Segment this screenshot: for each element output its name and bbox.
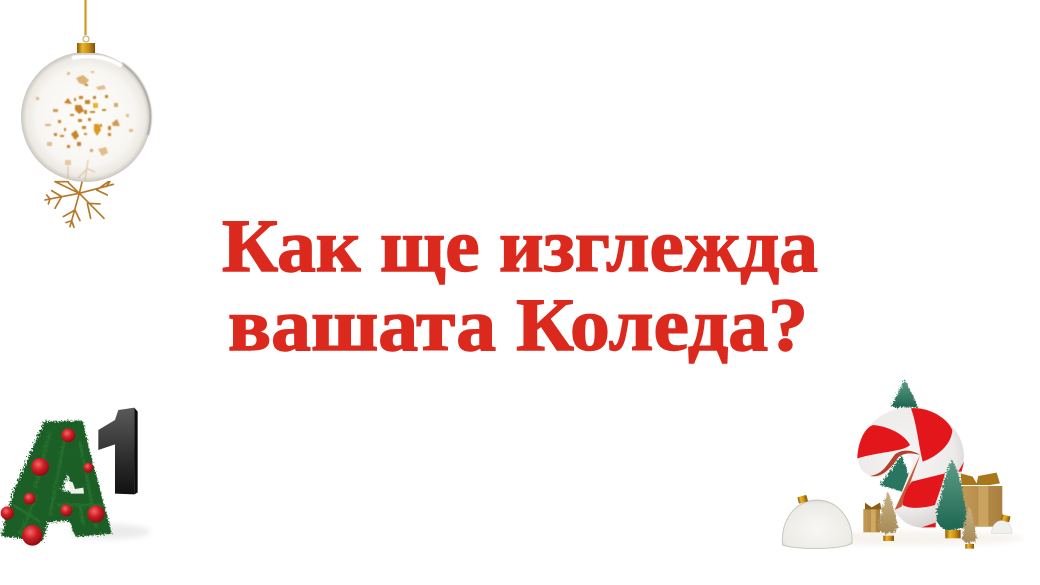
cane red stripe 2	[911, 408, 952, 462]
snowflake	[45, 177, 113, 227]
digit 1 side	[134, 408, 138, 494]
cane white body	[857, 408, 964, 528]
illustration: candy cane with gifts and trees	[782, 379, 1023, 549]
cap ring	[83, 36, 89, 42]
small dome ornament	[992, 514, 1012, 533]
glass dome ornament	[782, 495, 852, 549]
ground snow shadow	[797, 531, 1023, 546]
red baubles	[1, 428, 105, 546]
candy cane	[857, 408, 964, 528]
digit 1	[98, 408, 135, 494]
green bottle tree large	[937, 459, 966, 538]
cane red stripe 3	[903, 473, 945, 508]
title	[222, 205, 818, 367]
golden tree left	[878, 492, 898, 541]
reindeer	[68, 481, 84, 494]
title line 1: Как ще изглежда	[222, 205, 818, 288]
ornament cap	[77, 43, 95, 53]
small gift box	[863, 503, 882, 532]
large gift box	[960, 473, 1002, 527]
tree behind cane lower	[880, 455, 917, 497]
green letter A	[3, 422, 110, 539]
cane red stripe 1	[857, 425, 910, 458]
logo shadow	[70, 524, 150, 539]
golden tree right	[962, 507, 977, 549]
glass rim highlight	[122, 63, 151, 135]
logo: A1 Christmas tree	[1, 408, 150, 546]
cane red stripe 4	[922, 523, 936, 527]
reflected snowflake	[68, 160, 95, 180]
top highlight	[72, 56, 122, 66]
glass sphere	[21, 52, 151, 182]
gold flecks	[36, 71, 133, 165]
cane inner stripe	[895, 455, 920, 510]
letter A texture	[13, 428, 103, 535]
hanging string	[84, 0, 87, 35]
tree behind cane	[891, 379, 918, 407]
title line 2: вашата Коледа?	[228, 284, 808, 367]
ornament: glass bauble with snowflake	[21, 0, 151, 227]
